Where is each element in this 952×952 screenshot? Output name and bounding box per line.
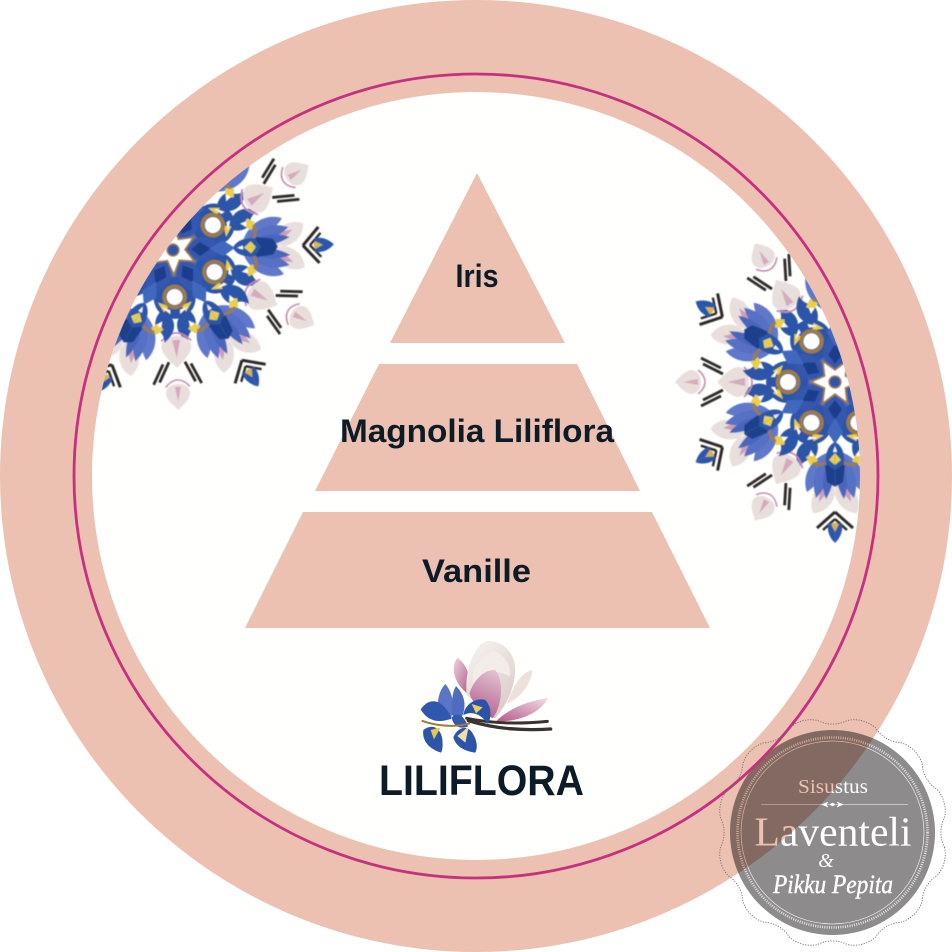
iris flower: [421, 684, 491, 753]
pyramid middle tier: [315, 364, 640, 491]
kaleidoscope flower: right: [675, 244, 860, 544]
badge text: Pikku Pepita: Pikku Pepita: [772, 870, 893, 899]
icon: magnolia, iris and vanilla bouquet: [421, 641, 551, 753]
scalloped dotted outline of the badge: [720, 720, 945, 945]
vanilla pods: [467, 718, 551, 730]
watermark badge: Sisustus Laventeli & Pikku Pepita: [730, 730, 935, 935]
pyramid bottom tier: [245, 512, 710, 628]
magenta ring: [74, 74, 878, 878]
badge text: ampersand: &: [818, 850, 834, 872]
badge tick ring: [738, 738, 928, 928]
inner white disc: [92, 92, 860, 860]
label: Magnolia Liliflora: Magnolia Liliflora: [340, 413, 614, 449]
fragrance pyramid: [245, 173, 710, 628]
label: Iris: Iris: [456, 258, 498, 294]
badge text: Sisustus: Sisustus: [798, 776, 868, 798]
badge disc: [730, 730, 935, 935]
magnolia flower: [454, 641, 548, 721]
badge inner line: [741, 741, 924, 924]
product name: LILIFLORA: LILIFLORA: [379, 757, 584, 805]
badge divider: [761, 802, 908, 807]
kaleidoscope flower: upper left: [102, 157, 334, 410]
pyramid top tier: [390, 173, 565, 343]
label: Vanille: Vanille: [422, 553, 531, 589]
badge text: Laventeli: Laventeli: [754, 808, 912, 854]
